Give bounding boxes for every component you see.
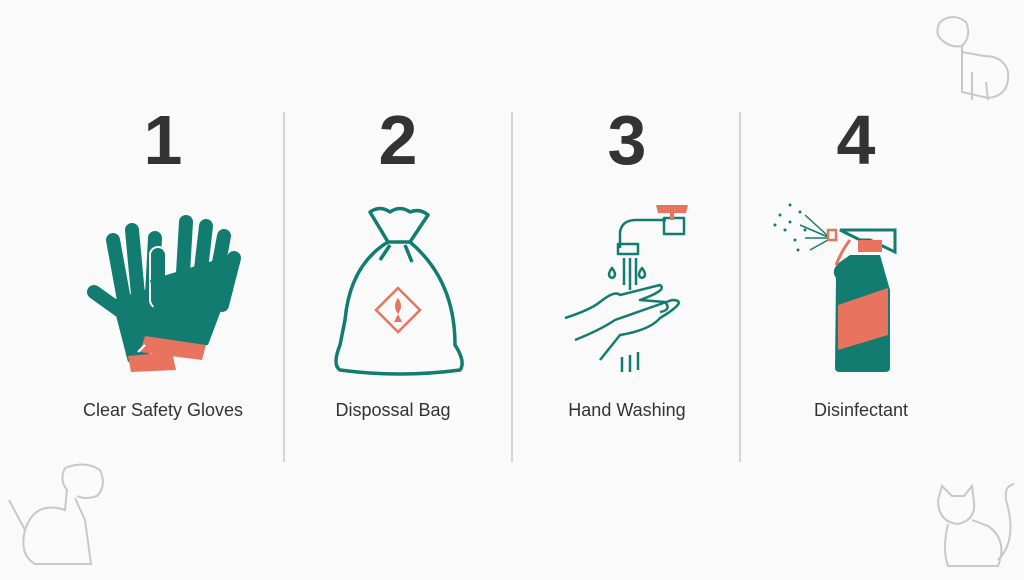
number 4: 4 — [837, 101, 875, 179]
decoration: dog bottom left — [8, 464, 104, 565]
label 1: Clear Safety Gloves — [83, 400, 243, 420]
number 1: 1 — [144, 101, 182, 179]
label 4: Disinfectant — [814, 400, 908, 420]
icon: gloves — [87, 215, 241, 372]
icon: hand washing — [564, 205, 688, 372]
icon: disinfectant spray — [774, 204, 896, 372]
number 3: 3 — [608, 101, 646, 179]
label 2: Dispossal Bag — [335, 400, 451, 420]
label 3: Hand Washing — [568, 400, 686, 420]
decoration: cat bottom right — [937, 483, 1014, 567]
decoration: dog top right — [936, 16, 1010, 100]
icon: disposal bag — [334, 206, 464, 376]
number 2: 2 — [379, 101, 417, 179]
